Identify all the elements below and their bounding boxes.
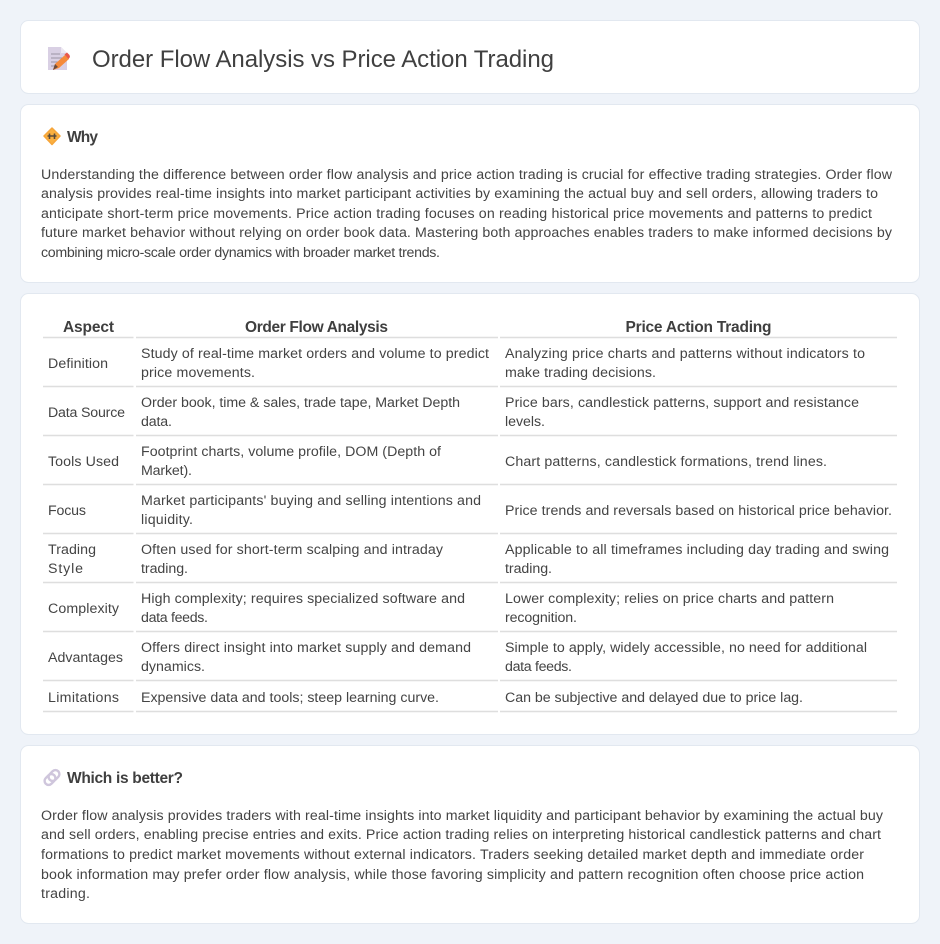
table header row xyxy=(43,319,897,338)
row: trading style: Style xyxy=(48,561,83,577)
text block: why paragraph: anticipate short-term price movements. Price action trading focuses on reading historical price movements and patterns to predict xyxy=(41,206,872,222)
row: data source: Price bars, candlestick patterns, support and resistance xyxy=(505,395,859,411)
table header row: Price Action Trading xyxy=(626,319,772,336)
row: complexity: data feeds. xyxy=(141,610,208,626)
row: focus: Focus xyxy=(48,503,86,519)
row: limitations: Can be subjective and delayed due to price lag. xyxy=(505,690,803,706)
row: data source xyxy=(43,395,897,436)
text block: which is better paragraph: trading. xyxy=(41,886,90,902)
row: data source: Order book, time & sales, trade tape, Market Depth xyxy=(141,395,460,411)
row: focus: Market participants' buying and selling intentions and xyxy=(141,493,481,509)
row: data source: data. xyxy=(141,414,172,430)
row: tools used: Footprint charts, volume profile, DOM (Depth of xyxy=(141,444,441,460)
row: focus xyxy=(43,493,897,534)
row: definition: Definition xyxy=(48,356,108,372)
text block: why paragraph xyxy=(41,167,893,261)
row: trading style: Often used for short-term scalping and intraday xyxy=(141,542,444,558)
row: limitations xyxy=(43,690,897,712)
row: tools used: Market). xyxy=(141,463,192,479)
row: trading style: Applicable to all timeframes including day trading and swing xyxy=(505,542,889,558)
title: Order Flow Analysis vs Price Action Trading xyxy=(92,46,554,73)
text block: which is better paragraph xyxy=(41,808,884,902)
row: tools used: Tools Used xyxy=(48,454,119,470)
text block: which is better paragraph: formations to predict market movements without external indicators. Traders seeking detailed market depth and immediate order xyxy=(41,847,864,863)
text block: which is better paragraph: and sell orders, enabling precise entries and exits. Price action trading relies on interpreting historical candlestick patterns and chart xyxy=(41,827,881,843)
row: tools used xyxy=(43,444,897,484)
row: advantages: data feeds. xyxy=(505,659,572,675)
row: trading style xyxy=(43,542,897,582)
row: advantages: Simple to apply, widely accessible, no need for additional xyxy=(505,640,867,656)
row: complexity: Complexity xyxy=(48,601,120,617)
row: data source: Data Source xyxy=(48,405,125,421)
row: focus: liquidity. xyxy=(141,512,193,528)
table header row: Order Flow Analysis xyxy=(245,319,388,336)
text block: which is better paragraph: book information may prefer order flow analysis, while those favoring simplicity and pattern recognition often choose price action xyxy=(41,867,864,883)
row: trading style: trading. xyxy=(141,561,188,577)
row: advantages: Advantages xyxy=(48,650,123,666)
icon: chain link xyxy=(43,768,61,787)
row: advantages xyxy=(43,640,897,680)
row: focus: Price trends and reversals based on historical price behavior. xyxy=(505,503,892,519)
heading: why: Why xyxy=(67,129,98,146)
icon: memo with pencil xyxy=(48,47,70,70)
row: tools used: Chart patterns, candlestick formations, trend lines. xyxy=(505,454,827,470)
row: limitations: Expensive data and tools; steep learning curve. xyxy=(141,690,439,706)
row: definition: make trading decisions. xyxy=(505,365,656,381)
panel: title header xyxy=(20,20,920,94)
text block: which is better paragraph: Order flow analysis provides traders with real-time insights into market liquidity and participant behavior by examining the actual buy xyxy=(41,808,884,824)
text block: why paragraph: future market behavior without relying on order book data. Mastering both approaches enables traders to make informed decisions by xyxy=(41,225,893,241)
heading: which is better: Which is better? xyxy=(67,770,183,787)
icon: warning diamond xyxy=(44,128,60,144)
panel: why xyxy=(20,104,920,282)
table header row: Aspect xyxy=(63,319,114,336)
row: definition xyxy=(43,346,897,386)
row: limitations: Limitations xyxy=(48,690,119,706)
text block: why paragraph: Understanding the difference between order flow analysis and price action trading is crucial for effective trading strategies. Order flow xyxy=(41,167,893,183)
row: definition: Study of real-time market orders and volume to predict xyxy=(141,346,489,362)
row: complexity: recognition. xyxy=(505,610,577,626)
row: definition: price movements. xyxy=(141,365,255,381)
text block: why paragraph: combining micro-scale order dynamics with broader market trends. xyxy=(41,245,440,261)
row: data source: levels. xyxy=(505,414,545,430)
row: definition: Analyzing price charts and patterns without indicators to xyxy=(505,346,865,362)
row: trading style: Trading xyxy=(48,542,96,558)
text block: why paragraph: analysis provides real-time insights into market participant activities by examining the actual buy and sell orders, allowing traders to xyxy=(41,186,878,202)
row: complexity: Lower complexity; relies on price charts and pattern xyxy=(505,591,834,607)
row: trading style: trading. xyxy=(505,561,552,577)
panel: which is better xyxy=(20,746,920,924)
row: complexity: High complexity; requires specialized software and xyxy=(141,591,465,607)
row: complexity xyxy=(43,591,897,632)
panel: comparison table xyxy=(20,294,920,734)
row: advantages: dynamics. xyxy=(141,659,205,675)
row: advantages: Offers direct insight into market supply and demand xyxy=(141,640,471,656)
